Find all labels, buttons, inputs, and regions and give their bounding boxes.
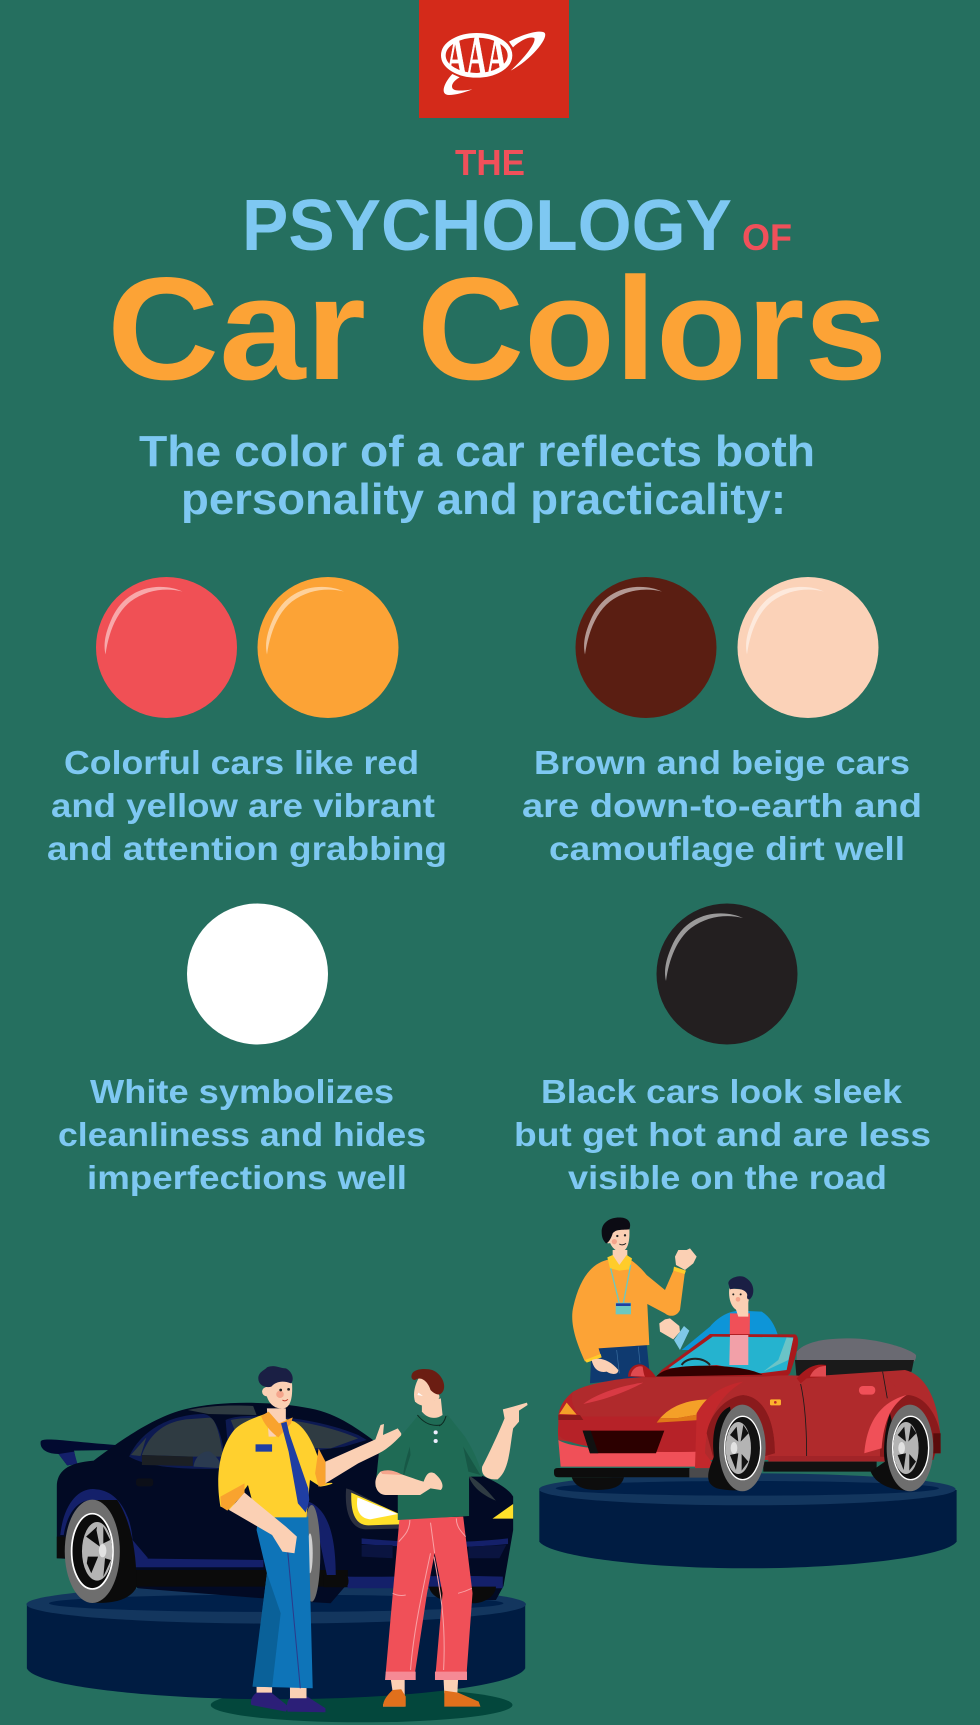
logo: AAA — [419, 0, 569, 118]
title — [107, 142, 887, 410]
panel: colorful cars — [47, 577, 447, 867]
caption: colorful cars: and attention grabbing — [47, 830, 447, 867]
caption: white cars: White symbolizes — [90, 1073, 394, 1110]
caption: colorful cars — [47, 744, 447, 867]
title word: THE: THE — [455, 142, 525, 183]
podium: navy — [539, 1473, 957, 1568]
man in yellow shirt and tie — [218, 1366, 401, 1712]
title word: PSYCHOLOGY: PSYCHOLOGY — [242, 186, 732, 266]
title words: Car Colors: Car — [107, 247, 366, 410]
swatch: red — [96, 577, 237, 718]
panel: white cars — [58, 904, 426, 1196]
caption: black cars — [514, 1073, 931, 1196]
title words: Car Colors: Colors — [417, 247, 887, 410]
intro text: personality and practicality: — [181, 475, 786, 524]
swatch: beige — [738, 577, 878, 718]
intro text — [139, 427, 815, 524]
illustration: two men and navy sports car on podium — [27, 1366, 528, 1722]
wheel: rear — [871, 1405, 933, 1491]
panel: brown and beige cars — [522, 577, 922, 867]
title word: OF: OF — [742, 217, 792, 258]
swatch: black — [656, 904, 798, 1044]
caption: white cars: cleanliness and hides — [58, 1116, 426, 1153]
caption: brown and beige cars — [522, 744, 922, 867]
caption: white cars — [58, 1073, 426, 1196]
swatch: brown — [576, 577, 716, 718]
car: navy sports car — [41, 1403, 513, 1603]
caption: black cars: but get hot and are less — [514, 1116, 931, 1153]
intro text: The color of a car reflects both — [139, 427, 815, 476]
caption: brown and beige cars: camouflage dirt well — [549, 830, 905, 867]
wheel: front — [708, 1405, 766, 1491]
illustration: two men and red convertible on podium — [539, 1218, 957, 1568]
title words: Car Colors — [107, 247, 887, 410]
man in green shirt and coral trousers — [375, 1369, 528, 1707]
wheel: front — [303, 1505, 320, 1602]
caption: colorful cars: Colorful cars like red — [64, 744, 419, 781]
salesman in orange sweater — [572, 1218, 697, 1383]
caption: black cars: Black cars look sleek — [541, 1073, 903, 1110]
swatch: yellow — [258, 577, 398, 718]
caption: white cars: imperfections well — [87, 1159, 407, 1196]
caption: colorful cars: and yellow are vibrant — [51, 787, 435, 824]
caption: black cars: visible on the road — [568, 1159, 887, 1196]
panel: black cars — [514, 904, 931, 1196]
driver in blue jacket — [659, 1276, 787, 1373]
logo: AAA: AAA — [446, 25, 507, 88]
swatch: white — [187, 904, 328, 1044]
caption: brown and beige cars: are down-to-earth and — [522, 787, 922, 824]
caption: brown and beige cars: Brown and beige cars — [534, 744, 910, 781]
car: red convertible — [554, 1334, 941, 1491]
wheel: rear — [65, 1500, 136, 1603]
podium: navy — [27, 1585, 526, 1699]
